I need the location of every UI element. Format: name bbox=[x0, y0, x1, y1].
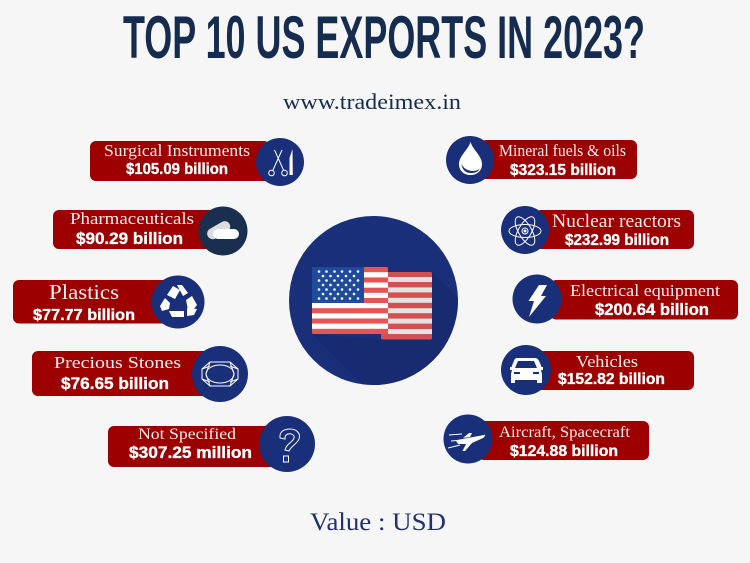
item: nuclear reactors: $232.99 billion bbox=[565, 232, 669, 249]
item: precious stones: Precious Stones bbox=[54, 353, 181, 372]
item: aircraft and spacecraft bbox=[444, 414, 649, 464]
icon: atom bbox=[509, 214, 541, 248]
back flag bbox=[381, 272, 432, 340]
item: mineral fuels and oils bbox=[446, 136, 637, 184]
footer: value unit: Value : USD bbox=[310, 509, 446, 536]
icon: oil drop bbox=[459, 142, 482, 175]
icon: lightning bolt bbox=[528, 285, 547, 317]
icon: car bbox=[510, 358, 543, 383]
item: not specified: Not Specified bbox=[138, 426, 236, 443]
icon: airplane bbox=[448, 433, 485, 451]
item: pharmaceuticals: $90.29 billion bbox=[76, 230, 183, 248]
item: surgical instruments: $105.09 billion bbox=[126, 161, 228, 178]
item: mineral fuels and oils: $323.15 billion bbox=[510, 162, 616, 179]
item: electrical equipment: $200.64 billion bbox=[595, 301, 709, 319]
icon: pills bbox=[205, 219, 239, 241]
item: vehicles: $152.82 billion bbox=[558, 371, 665, 388]
icon: gemstone bbox=[202, 362, 238, 386]
item: nuclear reactors: Nuclear reactors bbox=[552, 211, 681, 232]
item: not specified bbox=[108, 416, 315, 472]
item: precious stones bbox=[32, 346, 248, 402]
item: mineral fuels and oils: Mineral fuels & oils bbox=[499, 141, 626, 160]
item: vehicles: Vehicles bbox=[576, 352, 638, 371]
item: pharmaceuticals bbox=[53, 206, 248, 256]
central flag emblem bbox=[289, 216, 458, 385]
item: surgical instruments bbox=[90, 138, 304, 186]
item: pharmaceuticals: Pharmaceuticals bbox=[70, 209, 194, 228]
icon: surgical tools bbox=[269, 149, 293, 176]
item: plastics bbox=[13, 276, 204, 328]
item: aircraft and spacecraft: $124.88 billion bbox=[510, 443, 618, 460]
icon: recycling bbox=[160, 285, 197, 317]
item: electrical equipment: Electrical equipment bbox=[570, 281, 720, 300]
item: nuclear reactors bbox=[501, 206, 694, 254]
item: not specified: $307.25 million bbox=[129, 444, 252, 462]
item: surgical instruments: Surgical Instruments bbox=[104, 141, 250, 160]
icon: question mark bbox=[280, 429, 300, 462]
website address: www.tradeimex.in bbox=[283, 89, 461, 114]
item: precious stones: $76.65 billion bbox=[61, 375, 169, 393]
item: aircraft and spacecraft: Aircraft, Spacecraft bbox=[499, 424, 631, 441]
item: electrical equipment bbox=[512, 274, 738, 324]
item: plastics: Plastics bbox=[49, 280, 119, 304]
item: vehicles bbox=[501, 345, 694, 395]
item: plastics: $77.77 billion bbox=[33, 307, 135, 324]
front flag bbox=[312, 267, 388, 334]
